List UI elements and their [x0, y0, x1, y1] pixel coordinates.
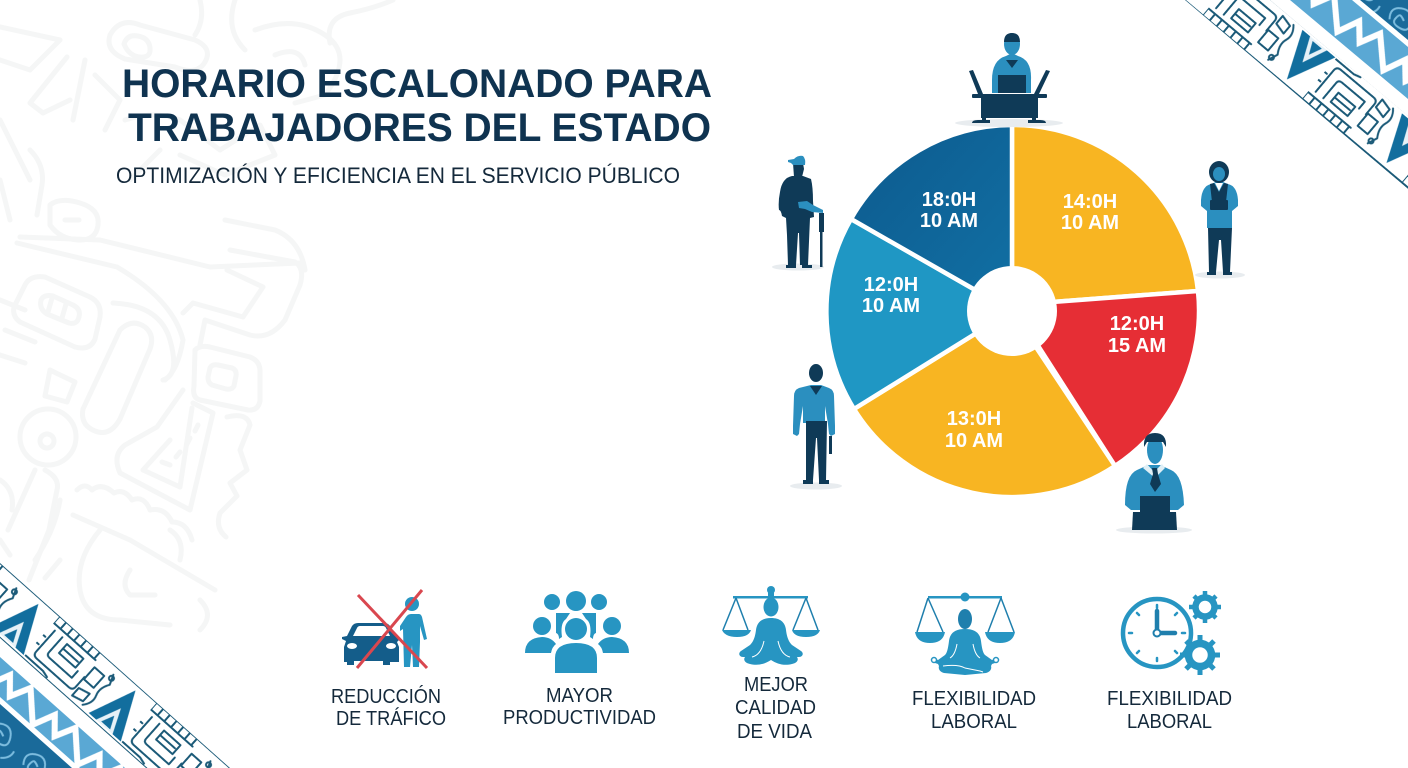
slice: 18:0H 10 AM	[851, 125, 1012, 311]
benefit: reducción de tráfico: REDUCCIÓN	[331, 685, 441, 708]
figure: standing worker (lower left)	[790, 364, 842, 490]
icon: scale with meditating figure	[915, 592, 1015, 675]
pie chart: staggered schedule: 18:0H	[922, 189, 976, 211]
slice: 12:0H 10 AM	[826, 219, 1012, 409]
pie chart: staggered schedule: 13:0H	[947, 408, 1001, 430]
benefit: mejor calidad de vida: CALIDAD	[735, 696, 816, 719]
benefit: reducción de tráfico	[331, 590, 446, 730]
background pattern	[0, 0, 393, 630]
benefit: flexibilidad laboral (balance)	[912, 592, 1036, 733]
figure: worker with cane (left)	[772, 156, 824, 270]
title: TRABAJADORES DEL ESTADO	[128, 106, 711, 150]
figure: woman with tablet (right)	[1195, 161, 1245, 278]
benefit: flexibilidad laboral (balance): LABORAL	[931, 710, 1017, 733]
pie chart: staggered schedule: 15 AM	[1108, 335, 1166, 357]
pie chart: staggered schedule: 12:0H	[864, 274, 918, 296]
title	[122, 62, 712, 150]
icon: clock and gears	[1123, 591, 1221, 675]
benefit: reducción de tráfico: DE TRÁFICO	[336, 707, 446, 730]
pie chart: staggered schedule	[826, 125, 1199, 497]
slice: 14:0H 10 AM	[1012, 125, 1198, 305]
subtitle: OPTIMIZACIÓN Y EFICIENCIA EN EL SERVICIO PÚBLICO	[116, 163, 680, 188]
figure: man with laptop (lower right)	[1116, 433, 1192, 534]
benefit: flexibilidad laboral (clock): LABORAL	[1127, 710, 1212, 733]
figure: worker at desk (top)	[955, 33, 1063, 127]
pie chart: staggered schedule: 14:0H	[1063, 191, 1117, 213]
pie chart: staggered schedule: 10 AM	[945, 430, 1003, 452]
icon: scale with meditating figure	[722, 586, 820, 665]
icon: group of people	[525, 591, 629, 673]
pie chart: staggered schedule: 10 AM	[862, 295, 920, 317]
pie chart: staggered schedule: 10 AM	[1061, 212, 1119, 234]
benefit: flexibilidad laboral (balance): FLEXIBILIDAD	[912, 687, 1036, 710]
pie chart: staggered schedule: 12:0H	[1110, 313, 1164, 335]
decorative corner band: bottom left	[0, 563, 230, 768]
pie chart: staggered schedule: 10 AM	[920, 210, 978, 232]
benefit: mayor productividad: MAYOR	[546, 684, 613, 707]
benefit: mejor calidad de vida	[722, 586, 820, 743]
benefit: flexibilidad laboral (clock)	[1107, 591, 1232, 733]
slice: 12:0H 15 AM	[1012, 291, 1199, 466]
title: HORARIO ESCALONADO PARA	[122, 62, 712, 106]
benefit: mejor calidad de vida: MEJOR	[744, 673, 808, 696]
benefit: mejor calidad de vida: DE VIDA	[737, 720, 812, 743]
benefit: flexibilidad laboral (clock): FLEXIBILIDAD	[1107, 687, 1232, 710]
benefit: mayor productividad: PRODUCTIVIDAD	[503, 706, 656, 729]
slice: 13:0H 10 AM	[854, 311, 1115, 497]
benefit: mayor productividad	[503, 591, 656, 729]
icon: car and person crossed out	[342, 590, 427, 668]
decorative corner band: top right	[1185, 0, 1408, 189]
